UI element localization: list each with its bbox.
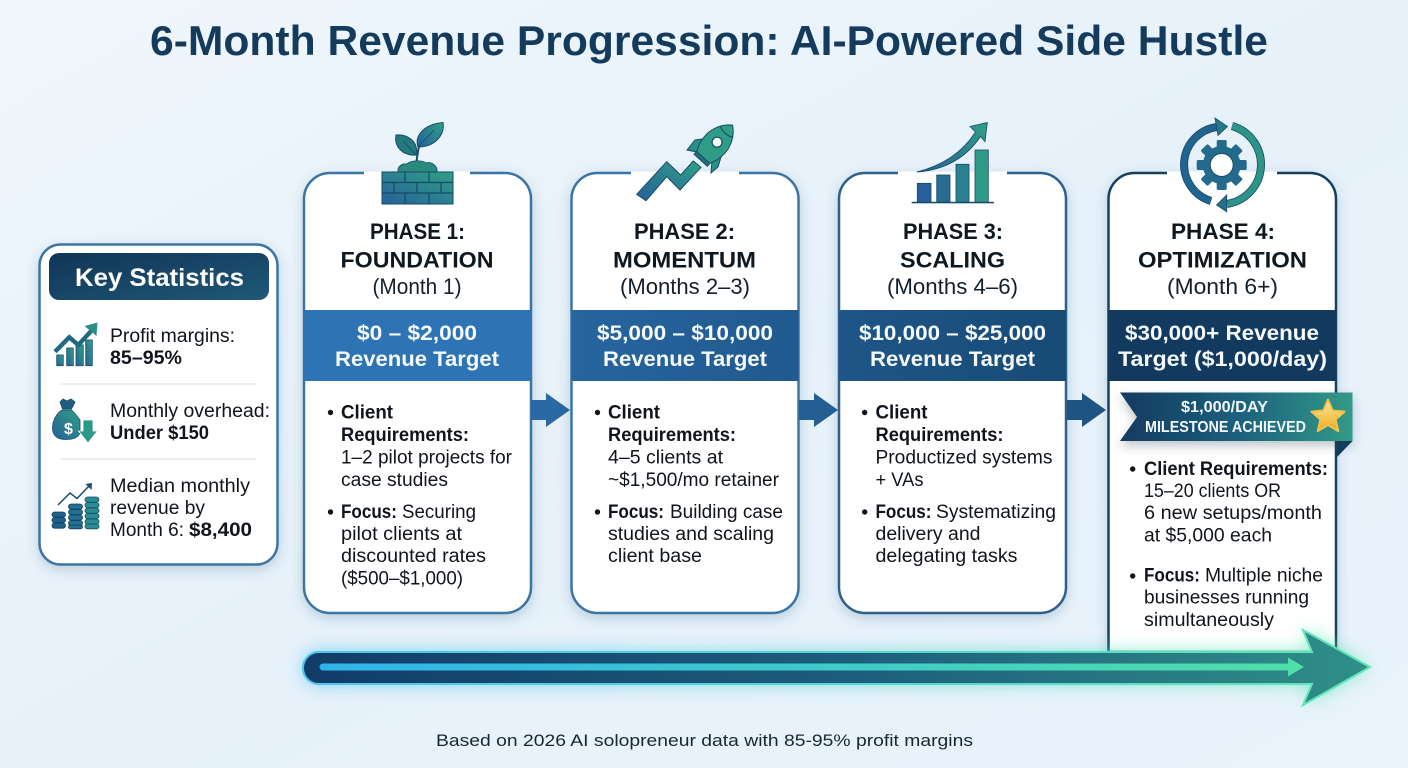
stat: median monthly revenue: Month 6: [110,520,184,541]
icon: sprout on brick wall [382,122,453,204]
phase 2 details: 4–5 clients at [608,448,724,468]
phase 4 details: businesses running [1144,588,1309,608]
phase 1 revenue band: $0 – $2,000 [357,322,477,345]
phase 3 revenue band [839,310,1066,381]
icon: profit chart [55,322,98,366]
phase 1 revenue band: Revenue Target [335,348,499,371]
phase 2 details: Building case [670,502,783,523]
phase 3 heading: (Months 4–6) [887,274,1018,299]
stat: monthly overhead: Under $150 [110,423,209,444]
phase 1 details: case studies [341,470,448,491]
phase 2 details: studies and scaling [608,524,774,545]
phase 2 heading: (Months 2–3) [620,274,750,299]
stat: median monthly revenue: Median monthly [110,476,251,497]
phase 1 details: 1–2 pilot projects for [341,448,513,468]
phase 1 details: pilot clients at [341,524,463,545]
footer note: Based on 2026 AI solopreneur data with 85-95% profit margins [436,731,973,750]
arrow: phase 1 to phase 2 [531,393,570,427]
phase 2 details: ~$1,500/mo retainer [608,470,780,491]
phase 2 heading [613,219,756,299]
phase 3 revenue band: Revenue Target [870,348,1035,371]
icon: gold star [1311,400,1345,431]
phase 3 heading: PHASE 3: [903,219,1003,244]
phase 1 details: discounted rates [341,546,486,567]
phase 3 details: Productized systems [876,448,1052,468]
milestone ribbon: $1,000/DAY [1181,399,1269,416]
phase 2 details [595,402,783,567]
icon: gear with cycle arrows [1184,118,1261,212]
phase 1 heading: (Month 1) [372,274,462,299]
milestone ribbon [1120,392,1352,457]
stat: profit margins: 85–95% [110,348,182,369]
stat: median monthly revenue: revenue by [110,498,205,519]
phase 2 details: Client [608,402,661,424]
phase 3 revenue band: $10,000 – $25,000 [859,322,1046,345]
phase 1 revenue band [304,310,531,381]
title: 6-Month Revenue Progression: AI-Powered Side Hustle [150,17,1268,64]
icon: money bag with down arrow: $ [64,421,73,438]
phase 3 details: delegating tasks [876,546,1018,567]
phase 1 heading [340,219,494,299]
phase 2 details: client base [608,546,702,567]
phase 2 revenue band: $5,000 – $10,000 [597,322,773,345]
icon: growth bar chart [912,122,994,203]
phase 4 details: Client Requirements: [1144,459,1328,480]
phase 2 details: Requirements: [608,425,736,446]
phase 3 details: Systematizing [936,502,1056,523]
phase 4 details: 15–20 clients OR [1144,481,1281,502]
stat: monthly overhead [110,401,270,444]
phase 1 details: Client [341,402,394,424]
phase 1 details: Requirements: [341,425,469,446]
phase 2 heading: PHASE 2: [634,219,735,244]
phase 4 details: simultaneously [1144,610,1275,631]
phase 2 heading: MOMENTUM [613,248,756,272]
phase 3 details: Focus: [876,502,932,523]
phase 3 details: Client [876,402,928,424]
phase 1 details: Focus: [341,502,397,523]
stat: monthly overhead: Monthly overhead: [110,401,270,422]
icon: money bag with down arrow [52,399,98,443]
phase 3 details: Requirements: [876,425,1004,446]
phase 3 heading: SCALING [900,248,1005,272]
phase 4 heading: PHASE 4: [1171,219,1275,244]
phase 4 details: at $5,000 each [1144,526,1272,546]
milestone ribbon: MILESTONE ACHIEVED [1145,419,1306,436]
phase 1 heading: PHASE 1: [370,219,465,244]
stat: profit margins [110,326,235,369]
phase 4 revenue band: Target ($1,000/day) [1118,348,1327,371]
icon: rocket with zigzag [637,116,742,201]
key statistics heading [49,253,269,300]
arrow: phase 3 to phase 4 [1067,393,1106,427]
phase 4 heading: OPTIMIZATION [1138,248,1307,272]
phase 4 heading [1138,219,1307,299]
phase 4 details: Focus: [1144,566,1200,586]
timeline arrow [303,630,1370,705]
panel: phase 3 scaling [839,122,1066,613]
phase 4 details: Multiple niche [1205,566,1323,586]
phase 1 heading: FOUNDATION [340,248,494,272]
icon: coin stacks [52,483,99,529]
phase 1 details: Securing [402,502,476,523]
phase 1 details: ($500–$1,000) [341,568,463,590]
stat: median monthly revenue: $8,400 [189,520,252,541]
phase 3 details: delivery and [876,524,980,545]
phase 4 details: 6 new setups/month [1144,503,1322,524]
arrow: phase 2 to phase 3 [799,393,838,427]
key statistics heading: Key Statistics [75,264,244,292]
phase 4 details [1130,459,1328,631]
stat: profit margins: Profit margins: [110,326,235,347]
panel: key statistics [40,244,278,564]
stat: median monthly revenue [110,476,252,541]
phase 4 heading: (Month 6+) [1167,274,1278,299]
panel: phase 1 foundation [304,122,531,613]
phase 3 details [862,402,1056,567]
panel: phase 2 momentum [572,116,798,613]
phase 4 revenue band [1108,310,1336,381]
phase 3 heading [887,219,1018,299]
panel: phase 4 optimization [1108,118,1336,652]
phase 2 revenue band: Revenue Target [603,348,767,371]
phase 2 details: Focus: [608,502,664,523]
phase 4 revenue band: $30,000+ Revenue [1125,322,1319,345]
phase 1 details [328,402,513,590]
phase 3 details: + VAs [876,470,924,491]
phase 2 revenue band [572,310,798,381]
